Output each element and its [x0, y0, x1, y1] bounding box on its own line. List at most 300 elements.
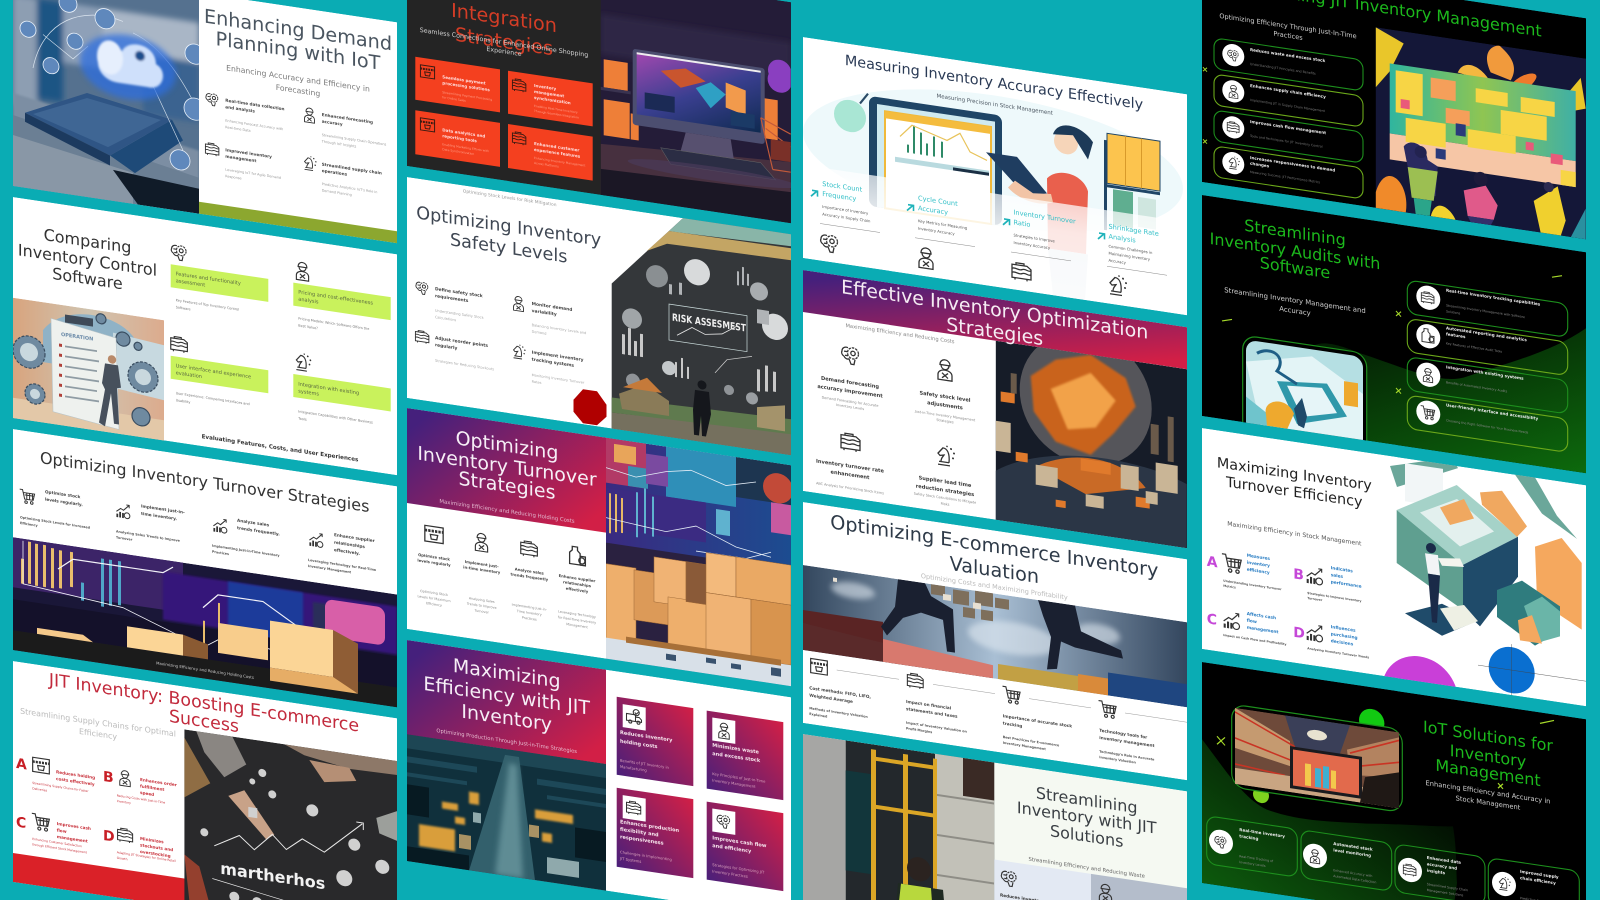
title: Software	[1260, 253, 1330, 283]
red feature cards: for Online Sales	[442, 95, 466, 103]
valuation items: Importance of accurate stock	[1003, 713, 1072, 729]
feature grid	[816, 341, 976, 511]
feature cards: Integration Capabilities with Other Business	[298, 410, 373, 425]
red feature cards: Seamless payment	[442, 74, 486, 86]
benefit cards: Implementing JIT in Supply Chain Management	[1250, 98, 1326, 113]
title: Strategies	[459, 467, 556, 504]
title: Measuring Inventory Accuracy Effectively	[845, 53, 1144, 113]
valuation items: Technology's Role in Accurate	[1099, 749, 1154, 762]
lettered items: flow	[57, 828, 67, 834]
IoT benefit cards: Inventory Levels	[1239, 860, 1266, 868]
panel: Effective Inventory Optimization Strategies	[803, 269, 1187, 548]
audit feature cards: Choosing the Right Software for Your Business Needs	[1446, 418, 1529, 435]
gradient feature cards: Minimizes waste	[712, 743, 759, 756]
title: Maximizing Inventory	[1217, 455, 1372, 494]
lettered items	[1207, 547, 1369, 660]
four strategy items: effectively.	[334, 547, 360, 556]
feature items grid: management	[225, 154, 256, 163]
subtitle: Maximizing Efficiency and Reducing Holding Costs	[439, 499, 575, 525]
valuation items: inventory management	[1099, 735, 1155, 748]
title: Comparing	[44, 225, 131, 257]
image: people at kanban board	[1376, 27, 1586, 240]
lettered items: Influences	[1331, 625, 1356, 634]
red feature cards: synchronization	[534, 95, 571, 105]
feature cards: User interface and experience	[176, 363, 251, 380]
subtitle: Optimizing Efficiency Through Just-In-Time	[1219, 12, 1357, 40]
feature items grid: Through IoT Insights	[321, 139, 357, 149]
four strategy items	[20, 485, 377, 578]
gradient feature cards: Key Principles of Just-in-Time	[712, 772, 765, 784]
feature items grid: Demand Planning	[322, 189, 352, 197]
decorative blue circle	[1489, 644, 1535, 697]
metric columns: Ratio	[1014, 218, 1030, 229]
feature grid: Inventory turnover rate	[816, 459, 884, 475]
green glow background	[1200, 737, 1457, 900]
feature items grid: Real-time Data	[225, 125, 251, 133]
panel: JIT Inventory Management (dark)	[1202, 0, 1587, 240]
feature cards: Best Value?	[298, 324, 318, 330]
feature cards: Tools	[297, 416, 307, 422]
four strategy items: levels regularly	[417, 558, 451, 568]
IoT benefit cards: tracking	[1239, 833, 1258, 841]
lettered items: Analyzing Inventory Turnover Trends	[1307, 646, 1369, 660]
lettered items: B	[103, 769, 114, 786]
four strategy items: Inventory Management	[308, 564, 352, 574]
lettered items: management	[1247, 625, 1278, 635]
accent circles	[1253, 691, 1384, 821]
title: Maximizing	[453, 654, 561, 693]
audit feature cards: Benefits of Automated Inventory Audits	[1446, 380, 1508, 394]
title: Inventory Audits with	[1210, 229, 1380, 273]
feature items: Define safety stock	[435, 287, 483, 299]
lettered items: Deliveries	[32, 786, 48, 793]
feature cards: assessment	[176, 278, 205, 289]
gradient feature cards: Enhances production	[620, 819, 679, 834]
image: data charts above stacked boxes	[606, 438, 791, 686]
lettered items: D	[1293, 625, 1305, 642]
IoT benefit cards: Streamlined Supply Chain	[1427, 882, 1468, 892]
valuation items: Impact on financial	[906, 699, 951, 711]
four strategy items: Leveraging Technology for Real-Time	[308, 558, 376, 572]
feature grid: Just-in-Time Inventory Management	[915, 409, 975, 422]
feature items: Understanding Safety Stock	[435, 309, 484, 320]
metric columns: Key Metrics for Measuring	[918, 218, 967, 230]
panel: Optimizing Inventory Turnover Strategies (gradient)	[407, 408, 793, 687]
lettered items: inventory	[1247, 560, 1270, 569]
feature items grid: Leveraging IoT for Agile Demand	[225, 168, 281, 180]
feature grid: Inventory Levels	[836, 403, 864, 411]
valuation items: Profit Margins	[906, 726, 932, 734]
subtitle: Forecasting	[276, 83, 320, 98]
feature grid: adjustments	[927, 400, 963, 412]
feature items: requirements	[435, 293, 469, 304]
red feature cards: experience features	[534, 147, 581, 159]
lettered items: sales	[1331, 572, 1344, 580]
feature items grid: Enhanced forecasting	[322, 112, 373, 125]
feature items: Rates	[532, 380, 542, 385]
gradient feature cards: Strategies for Optimizing JIT	[712, 863, 764, 875]
title: Turnover Efficiency	[1225, 475, 1363, 511]
lettered items: overstocking	[140, 849, 171, 858]
four strategy items: Enhance supplier	[559, 573, 595, 583]
four strategy items: Implement just-in-	[141, 503, 185, 515]
illustration: analyst with tablet and dashboard	[803, 67, 1183, 315]
gradient feature cards	[617, 697, 783, 892]
image: risk assessment chalkboard	[612, 208, 791, 455]
valuation items: Cost methods: FIFO, LIFO,	[809, 685, 871, 699]
red feature cards: Enhancing Inventory Management	[534, 156, 585, 168]
feature grid: accuracy improvement	[817, 384, 883, 400]
image: IoT cloud over conveyor	[13, 0, 199, 214]
title: Solutions	[1050, 821, 1123, 851]
feature items grid: accuracy	[322, 119, 343, 127]
IoT benefit cards	[1207, 816, 1579, 900]
four strategy items: effectively	[566, 586, 589, 594]
feature grid: enhancement	[831, 469, 870, 481]
benefit cards: changes	[1250, 161, 1270, 169]
red feature cards: Streamlining Payment Processing	[442, 90, 492, 102]
metric columns: Maintaining Inventory	[1108, 251, 1151, 262]
decorative magenta shape	[1382, 651, 1458, 738]
four strategy items: trends frequently	[510, 571, 549, 582]
lettered items	[16, 755, 178, 869]
title: Optimizing Inventory Turnover Strategies	[40, 448, 369, 516]
feature items grid: Enhancing Forecast Accuracy with	[225, 119, 283, 131]
valuation items: Inventory Management	[1003, 741, 1046, 751]
valuation items: Best Practices for E-commerce	[1003, 735, 1059, 747]
image: globe with logistics	[996, 340, 1187, 548]
feature items: Implement inventory	[532, 351, 583, 363]
lettered items: C	[16, 815, 26, 832]
valuation items: Impact of Inventory Valuation on	[906, 721, 967, 734]
IoT benefit cards: Enhanced Accuracy with	[1333, 868, 1372, 878]
lettered items: Improves cash	[57, 821, 91, 831]
gradient header	[803, 270, 1187, 369]
gradient feature cards: holding costs	[620, 739, 658, 750]
panel: JIT Inventory Boosting E-commerce Success	[13, 661, 397, 900]
lettered items: speed	[140, 790, 154, 797]
metric columns: Inventory Accuracy	[918, 226, 955, 236]
valuation items: tracking	[1003, 721, 1022, 728]
lettered items: Measures	[1247, 554, 1270, 562]
lettered items: Turnover	[1307, 596, 1323, 602]
four strategy items: Optimize stock	[45, 489, 80, 499]
metric columns	[811, 178, 1167, 304]
four strategy items: Practices	[212, 550, 229, 556]
subtitle: Streamlining Supply Chains for Optimal	[20, 706, 176, 739]
IoT benefit cards: accuracy and	[1427, 861, 1457, 871]
four strategy items: Turnover	[116, 535, 133, 542]
four strategy items: Enhance supplier	[334, 532, 375, 543]
gradient feature cards: responsiveness	[620, 834, 664, 847]
feature items: Monitor demand	[532, 302, 572, 313]
red feature cards: Enabling Real-Time Inventory	[534, 104, 578, 114]
feature items: variability	[532, 308, 557, 318]
title: Effective Inventory Optimization	[841, 275, 1148, 344]
four strategy items: Analyze sales	[237, 518, 269, 527]
red feature cards: Data analytics and	[442, 127, 485, 139]
title: Inventory	[461, 700, 552, 736]
subtitle: Streamlining Efficiency and Reducing Waste	[1029, 857, 1145, 880]
caption: Evaluating Features, Costs, and User Experiences	[202, 434, 359, 464]
feature items	[415, 281, 586, 392]
subtitle: Enhancing Accuracy and Efficiency in	[226, 63, 370, 94]
lettered items: Streamlining Supply Chains for Faster	[32, 781, 88, 793]
benefit cards	[1203, 36, 1363, 199]
four strategy items: Implement just-	[465, 559, 499, 569]
four strategy items: trends frequently.	[237, 525, 280, 537]
subtitle: Practices	[1273, 30, 1303, 42]
metric columns: Stock Count	[822, 180, 862, 194]
valuation items: Explained	[809, 712, 828, 719]
subtitle: Accuracy	[1279, 305, 1311, 317]
image: worker at warehouse rack	[803, 734, 994, 900]
feature tiles	[994, 860, 1187, 900]
four strategy items: in-time inventory	[463, 564, 501, 575]
feature items grid: Predictive Analytics: IoT's Role in	[322, 182, 377, 194]
title: Optimizing	[456, 426, 558, 465]
feature items: Strategies for Reducing Stockouts	[435, 359, 494, 371]
feature cards: systems	[298, 389, 319, 398]
metric columns: Analysis	[1108, 233, 1136, 245]
panel: Maximizing Efficiency with JIT Inventory	[407, 640, 791, 900]
audit feature cards: Key Features of Effective Audit Tools	[1446, 341, 1502, 354]
image: chalk drawing on dark table	[184, 730, 397, 900]
subtitle: Stock Management	[1456, 794, 1521, 812]
red feature cards	[415, 57, 593, 181]
gradient feature cards: Inventory Management	[712, 779, 756, 789]
title: IoT Solutions for	[1423, 717, 1553, 755]
feature items grid: Streamlining Supply Chain Operations	[322, 133, 386, 147]
decorative marks	[1217, 670, 1554, 796]
metric columns: Accuracy	[1108, 258, 1127, 265]
title: Efficiency with JIT	[423, 672, 590, 720]
title: Safety Levels	[450, 230, 567, 268]
title: Streamlining	[1036, 783, 1138, 817]
feature items: Demand	[532, 330, 546, 336]
panel: Streamlining Inventory Audits with Software	[1202, 195, 1586, 486]
panel: Optimizing Inventory Safety Levels	[407, 177, 791, 455]
subtitle: Experience	[486, 46, 522, 58]
gradient feature cards: JIT Systems	[619, 857, 641, 864]
feature grid: Supplier lead time	[919, 475, 971, 489]
four strategy items: Implementing Just-in-	[512, 603, 547, 612]
four strategy items: Analyzing Sales Trends to Improve	[116, 529, 180, 543]
four strategy items: levels regularly.	[45, 497, 83, 507]
feature items grid: Streamlined supply chain	[322, 162, 382, 176]
decorative marks	[1222, 225, 1562, 418]
benefit cards: Measuring Success: JIT Performance Metrics	[1250, 170, 1320, 184]
audit feature cards: Streamlining Inventory Management with Software	[1446, 303, 1525, 319]
red feature cards: Enabling Marketing Efforts with	[442, 142, 489, 153]
gradient feature cards: and excess stock	[712, 751, 761, 764]
subtitle: Optimizing Production Through Just-in-Time Strategies	[436, 728, 577, 755]
feature grid: Demand forecasting	[821, 376, 879, 390]
gradient feature cards: Manufacturing	[620, 765, 647, 773]
IoT benefit cards: chain efficiency	[1520, 875, 1556, 886]
title: Inventory	[1450, 741, 1527, 771]
feature cards: Pricing Models: Which Software Offers the	[298, 317, 369, 331]
panel: Streamlining Inventory with JIT Solutions	[803, 734, 1187, 900]
four strategy items: Practices	[522, 616, 537, 622]
metric columns: Cycle Count	[918, 194, 958, 208]
title: JIT Inventory: Boosting E-commerce	[48, 670, 359, 737]
lettered items: Metrics	[1223, 584, 1236, 590]
title: Strategies	[946, 313, 1043, 350]
audit feature cards	[1407, 280, 1568, 452]
IoT benefit cards: Enhanced data	[1427, 855, 1461, 865]
lettered items: Understanding Inventory Turnover	[1223, 579, 1281, 591]
crosshair lines	[1478, 639, 1586, 707]
title: Valuation	[950, 552, 1039, 588]
white fade over lower illustration	[803, 165, 1187, 315]
feature items grid: Real-time data collection	[225, 98, 285, 111]
lettered items: performance	[1331, 579, 1362, 590]
metric columns: Frequency	[822, 190, 856, 203]
image: chalk drawing on dark table: martherhos	[220, 859, 325, 893]
IoT benefit cards: Improved supply	[1520, 869, 1559, 880]
lettered items: Indicates	[1331, 566, 1353, 574]
title: Inventory Turnover	[417, 442, 597, 491]
red feature cards: management	[534, 89, 564, 98]
red feature cards: reporting tools	[442, 133, 477, 143]
subtitle: Enhancing Efficiency and Accuracy in	[1426, 779, 1550, 806]
valuation items	[809, 657, 1187, 772]
four strategy items: Implementing Just-in-Time Inventory	[212, 544, 280, 558]
subtitle: Optimizing Costs and Maximizing Profitability	[921, 572, 1068, 602]
red feature cards: Inventory	[534, 83, 556, 91]
feature cards: evaluation	[176, 370, 202, 380]
feature items: Monitoring Inventory Turnover	[532, 373, 584, 385]
image: man with operation checklist: OPERATION	[61, 332, 93, 343]
feature items grid: and analysis	[225, 104, 255, 114]
gradient feature cards: Benefits of JIT Inventory in	[620, 759, 669, 770]
bottom accent bar	[199, 202, 397, 243]
feature cards: analysis	[298, 297, 319, 306]
four strategy items: Optimizing Stock	[420, 589, 448, 597]
feature items grid: Response	[225, 174, 242, 181]
four strategy items: time inventory.	[141, 511, 177, 521]
panel: Integration Strategies	[407, 0, 798, 224]
feature cards: Features and functionality	[176, 271, 241, 287]
four strategy items: for Real-Time Inventory	[558, 615, 596, 625]
top caption: Optimizing Stock Levels for Risk Mitigation	[463, 188, 557, 208]
panel: Optimizing E-commerce Inventory Valuation	[803, 502, 1187, 780]
benefit cards: Reduces waste and excess stock	[1250, 47, 1325, 63]
lettered items: fulfillment	[140, 783, 164, 792]
gradient feature cards: and efficiency	[712, 843, 752, 855]
metric columns: Common Challenges in	[1108, 244, 1152, 255]
four strategy items: Management	[566, 622, 589, 629]
feature cards: Key Features of Top Inventory Control	[176, 298, 239, 312]
metric columns: Inventory Turnover	[1014, 208, 1076, 226]
title: Optimizing E-commerce Inventory	[830, 510, 1158, 582]
metric columns: Importance of Inventory	[822, 204, 868, 216]
four strategy items	[417, 523, 596, 631]
gradient feature cards: Improves cash flow	[712, 835, 766, 849]
benefit cards: Enhances supply chain efficiency	[1250, 83, 1326, 99]
feature cards: Pricing and cost-effectiveness	[298, 290, 373, 307]
caption: Maximizing Efficiency and Reducing Holding Costs	[156, 660, 254, 680]
title: Strategies	[455, 23, 553, 60]
panel: Measuring Inventory Accuracy Effectively	[803, 37, 1187, 315]
lettered items: A	[1207, 554, 1218, 571]
feature grid: Safety Stock Calculations to Mitigate	[914, 492, 976, 505]
lettered items: Impact on Cash Flow and Profitability	[1223, 633, 1286, 646]
red feature cards: Through Seamless Integration	[533, 109, 579, 120]
feature items grid: operations	[322, 168, 348, 177]
valuation items: Technology tools for	[1099, 728, 1147, 740]
image: isometric audit illustration	[1243, 335, 1367, 454]
lettered items: Strategies to Improve Inventory	[1307, 591, 1361, 603]
IoT benefit cards: Real-Time Tracking of	[1239, 854, 1273, 863]
panel: IoT Solutions for Inventory Management	[1200, 662, 1586, 900]
icon: red octagon	[574, 388, 606, 427]
valuation items: Weighted Average	[809, 693, 853, 704]
feature grid: Risks	[941, 502, 950, 507]
four strategy items: relationships	[334, 540, 365, 549]
image: men leaping across containers	[803, 565, 1187, 708]
feature items: tracking systems	[532, 357, 574, 369]
gradient feature cards: flexibility and	[620, 827, 659, 839]
lettered items: Affects cash	[1247, 612, 1276, 621]
lettered items: Minimizes	[140, 836, 164, 844]
lettered items: A	[16, 756, 27, 773]
lettered items: through Efficient Stock Management	[32, 842, 88, 855]
lettered items: costs effectively	[56, 776, 95, 787]
IoT benefit cards: Management Solutions	[1427, 888, 1464, 897]
four strategy items: Leveraging Technology	[558, 610, 596, 619]
IoT benefit cards: Real-time inventory	[1239, 827, 1285, 839]
subtitle: Maximizing Efficiency in Stock Management	[1227, 521, 1362, 548]
four strategy items: Analyzing Sales	[469, 596, 495, 604]
feature items: Adjust reorder points	[435, 336, 488, 349]
feature cards	[171, 243, 391, 434]
lettered items: purchasing	[1331, 631, 1358, 641]
four strategy items: Time Inventory	[516, 609, 542, 617]
audit feature cards: Integration with existing systems	[1446, 364, 1524, 381]
title: Streamlining	[1244, 216, 1346, 250]
IoT benefit cards: Automated Data Collection	[1333, 874, 1376, 884]
lettered items: C	[1207, 611, 1217, 629]
audit feature cards: Automated reporting and analytics	[1446, 325, 1527, 342]
feature items: regularly	[435, 342, 457, 352]
feature items: Calculations	[435, 315, 456, 322]
panel: Enhancing Demand Planning with IoT	[13, 0, 397, 243]
benefit cards: Improves cash flow management	[1250, 119, 1326, 135]
valuation items: Inventory Valuation	[1099, 755, 1136, 765]
title: Enhancing Demand	[204, 5, 392, 55]
title: Management	[1435, 756, 1541, 790]
lettered items: D	[103, 828, 115, 846]
benefit cards: Tools and Techniques for JIT Inventory Control	[1249, 134, 1323, 149]
image: warehouse aerial	[407, 734, 606, 891]
lettered items: flow	[1247, 618, 1257, 625]
gradient feature cards: Challenges in Implementing	[620, 850, 672, 862]
red feature cards: Enhanced customer	[534, 141, 579, 153]
feature cards: Software	[176, 305, 191, 311]
lettered items: efficiency	[1247, 567, 1270, 576]
subtitle: Maximizing Efficiency and Reducing Costs	[845, 323, 955, 345]
valuation items: Methods of Inventory Valuation	[809, 706, 868, 719]
subtitle: Seamless Connections for Enhanced Online Shopping	[420, 27, 588, 59]
image: computer with online shop	[600, 0, 791, 224]
lettered items: Reduces holding	[56, 769, 95, 780]
audit feature cards: User-friendly interface and accessibility	[1446, 402, 1538, 421]
red feature cards: Data Synchronization	[442, 147, 474, 156]
image: man with operation checklist	[13, 298, 164, 440]
metric columns: Accuracy in Supply Chain	[822, 211, 871, 224]
